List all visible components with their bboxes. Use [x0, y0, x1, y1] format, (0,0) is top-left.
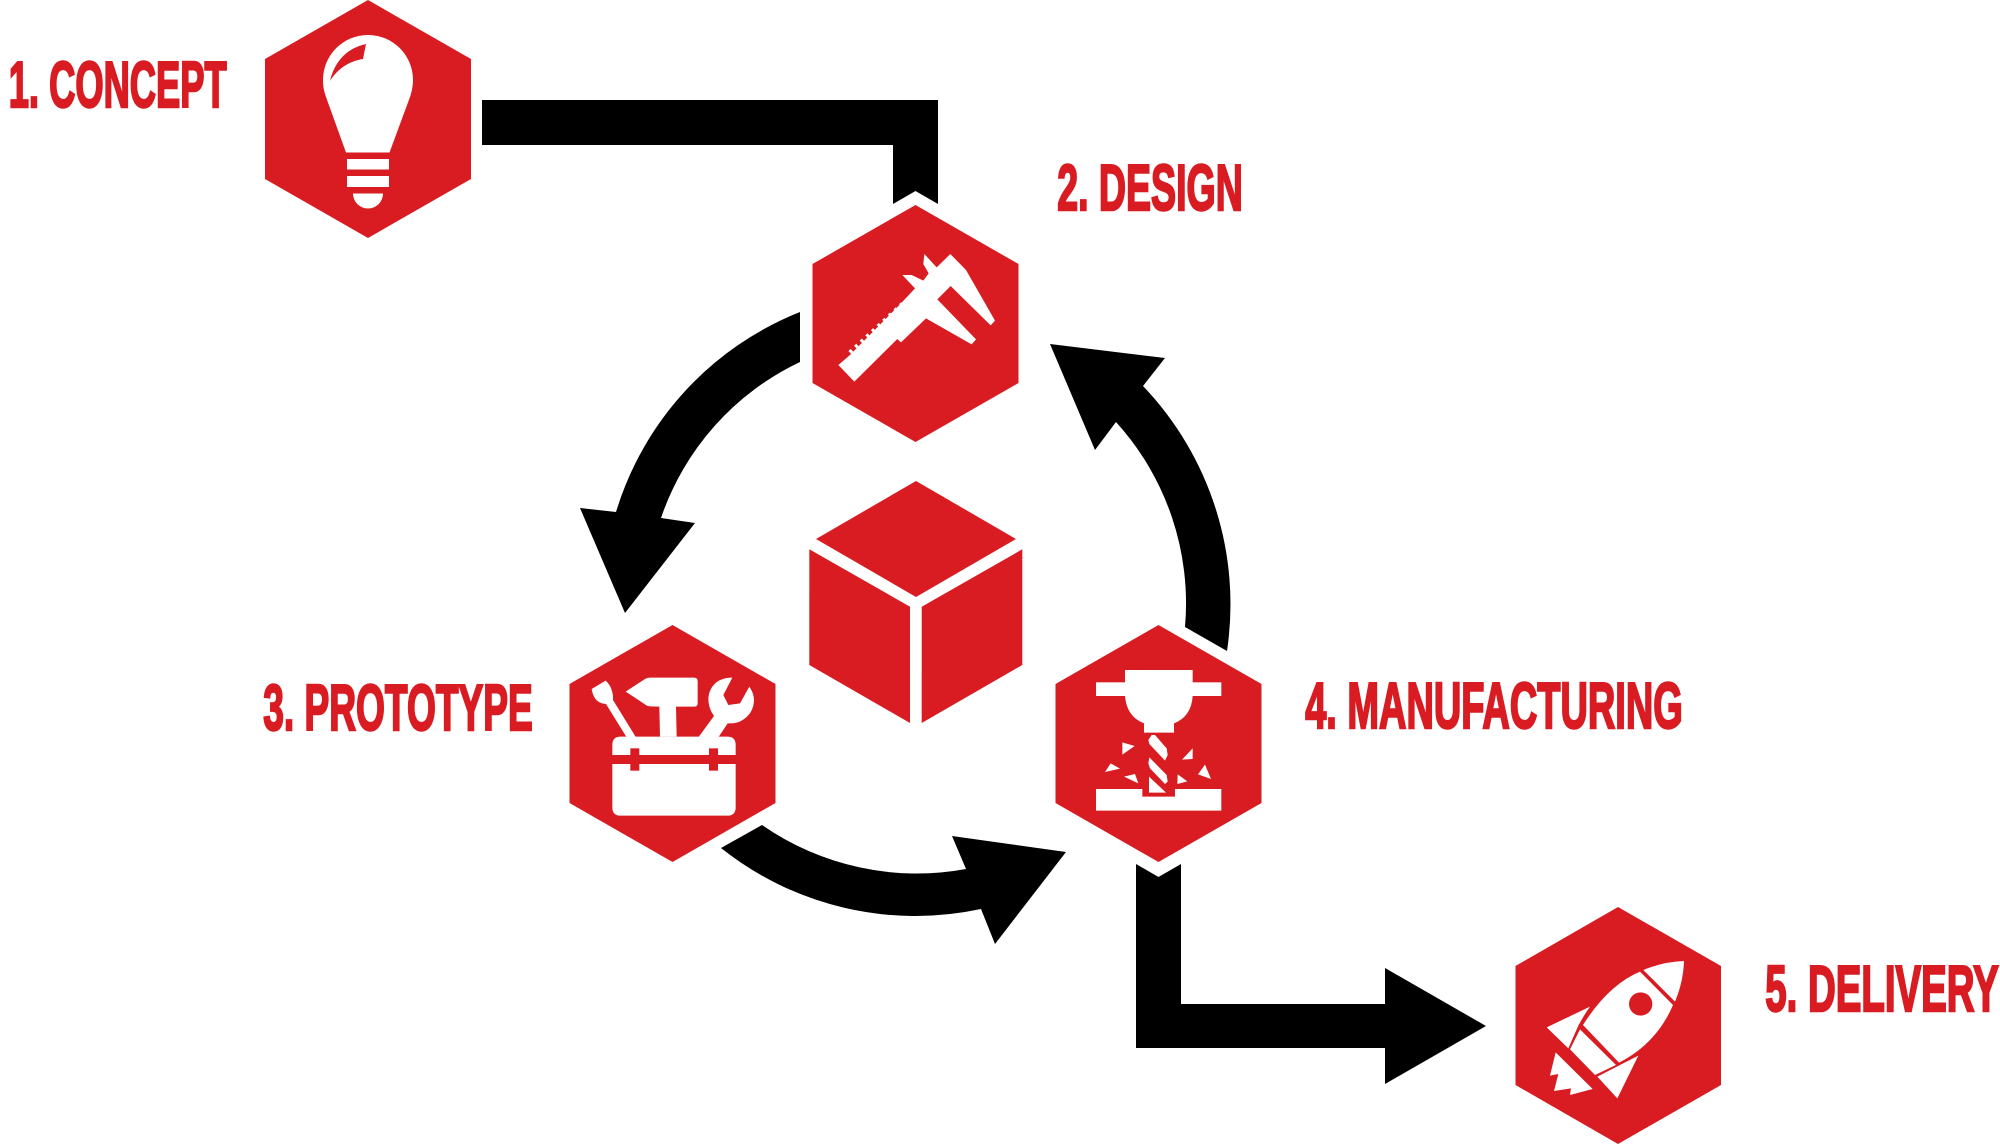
icon: rocket	[1547, 961, 1684, 1098]
label: 4. manufacturing: 4. MANUFACTURING	[1305, 669, 1683, 742]
icon: toolbox	[592, 678, 754, 816]
label: 1. concept: 1. CONCEPT	[9, 48, 227, 121]
step 4: manufacturing	[1056, 625, 1262, 862]
label: 2. design: 2. DESIGN	[1057, 151, 1243, 224]
step 2: design	[812, 205, 1018, 442]
icon: light bulb	[323, 35, 413, 209]
hexagon	[265, 0, 471, 238]
label: 3. prototype: 3. PROTOTYPE	[263, 671, 533, 744]
cube right face	[922, 549, 1022, 723]
arrow: design to prototype	[580, 312, 800, 613]
hexagon	[570, 625, 776, 862]
arrow: prototype to manufacturing	[721, 825, 1066, 944]
hexagon	[812, 205, 1018, 442]
cube left face	[809, 549, 910, 723]
icon: milling machine	[1096, 670, 1221, 811]
arrow: manufacturing to delivery	[1136, 864, 1486, 1084]
arrow: concept to design	[482, 100, 938, 204]
cube top face	[816, 481, 1016, 597]
central cube icon	[809, 481, 1022, 723]
hexagon	[1056, 625, 1262, 862]
step 1: concept	[265, 0, 471, 238]
arrow: manufacturing to design	[1050, 344, 1230, 651]
step 5: delivery	[1516, 907, 1721, 1144]
icon: caliper	[838, 254, 995, 382]
hexagon	[1516, 907, 1721, 1144]
step 3: prototype	[570, 625, 776, 862]
